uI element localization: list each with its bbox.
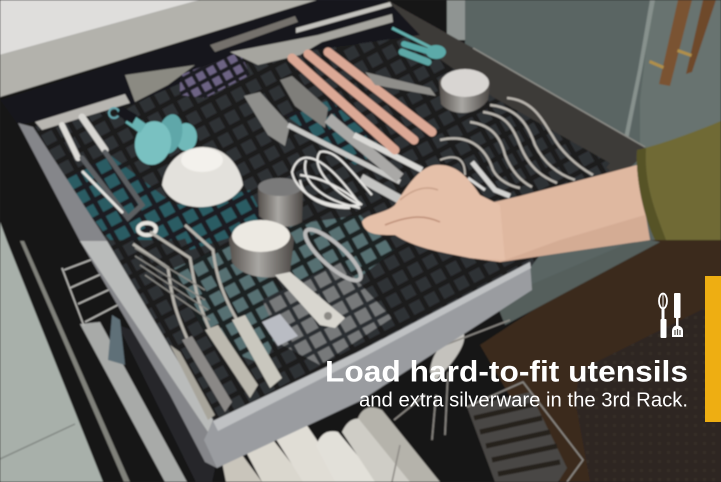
arm [440,165,650,262]
top dark rail [0,0,420,125]
rack back wall [380,0,645,270]
perforated steel section [262,262,392,365]
tongs, left [62,117,142,218]
silverware forks, left [133,225,282,420]
lower rack tines, left [62,248,135,326]
silverware basket [392,320,583,482]
yellow accent bar [705,276,721,422]
steel measuring cups [229,69,490,277]
grey-blue mat sections [170,215,395,365]
lower rack plates [222,330,464,482]
teal scoop [109,106,197,168]
rack floor [33,20,610,425]
violet mat section [180,52,250,98]
cup handle and loop [138,223,367,328]
tools, back right [365,72,436,96]
teal mat sections [62,100,385,250]
floor and rug [480,238,721,482]
whisk [292,152,372,208]
hand [362,165,505,260]
cabinet handles [649,0,716,86]
counter top [0,0,317,97]
caption heading: Load hard-to-fit utensils [325,356,688,388]
left cabinet panel [0,222,130,482]
icon: whisk and spatula [659,293,683,338]
right tray [468,130,610,232]
silverware forks, right [440,98,593,196]
pink tongs [292,52,432,150]
white bowl [162,147,243,207]
spatulas and tongs [244,76,422,205]
small teal spatulas [392,28,446,62]
door liner [80,315,215,482]
rack rim left [18,123,222,468]
top utensils [35,2,393,130]
olive sleeve [637,121,721,240]
small utensil icon tag [262,314,298,346]
kitchen cabinets [447,0,721,290]
caption subheading: and extra silverware in the 3rd Rack. [359,390,688,412]
rack rim front [204,262,532,468]
